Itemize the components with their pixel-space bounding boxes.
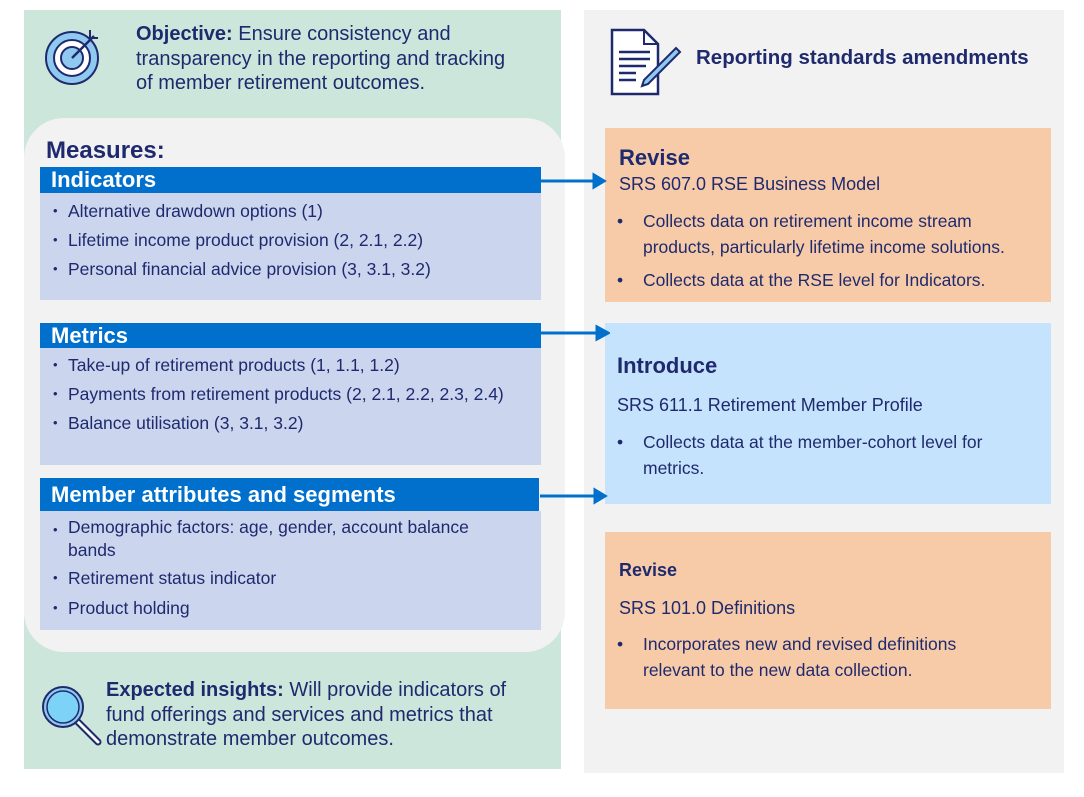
bar: member attributes: [40, 478, 539, 511]
panel: right gray: [584, 10, 1064, 773]
box: revise SRS 101.0: SRS 101.0 Definitions: [619, 598, 795, 618]
list: indicators: Alternative drawdown options (1): [68, 201, 323, 221]
text: objective: of member retirement outcomes.: [136, 72, 425, 94]
bar: metrics: Metrics: [51, 323, 128, 348]
bar: indicators: Indicators: [51, 167, 156, 192]
list: metrics: Take-up of retirement products (1, 1.1, 1.2): [68, 355, 400, 375]
panel: left green: [24, 10, 561, 769]
box: introduce SRS 611.1: Collects data at the member-cohort level for: [643, 432, 982, 452]
box: revise SRS 101.0: relevant to the new data collection.: [643, 660, 912, 680]
list: metrics: Balance utilisation (3, 3.1, 3.2): [68, 413, 303, 433]
bar: metrics: [40, 323, 541, 348]
box: revise SRS 607.0: Collects data at the RSE level for Indicators.: [643, 270, 985, 290]
section: metrics: [40, 323, 541, 465]
list: member attributes: [40, 511, 541, 630]
list: member attributes: Product holding: [68, 598, 190, 618]
box: revise SRS 607.0: [605, 128, 1051, 302]
text: expected insights: demonstrate member outcomes.: [106, 728, 394, 750]
box: revise SRS 607.0: SRS 607.0 RSE Business Model: [619, 174, 880, 194]
text: objective: [136, 23, 505, 94]
box: revise SRS 607.0: Collects data on retirement income stream: [643, 211, 972, 231]
heading: reporting standards amendments: Reporting standards amendments: [696, 46, 1029, 69]
box: introduce SRS 611.1: [605, 323, 1051, 504]
icon: magnifier: [42, 686, 102, 746]
bar: member attributes: Member attributes and segments: [51, 482, 396, 507]
box: revise SRS 101.0: [605, 532, 1051, 709]
box: introduce SRS 611.1: metrics.: [643, 458, 704, 478]
list: metrics: [40, 348, 541, 465]
text: expected insights: Expected insights: Will provide indicators of: [106, 679, 506, 701]
heading: measures: Measures:: [46, 137, 165, 164]
list: member attributes: bands: [68, 540, 116, 560]
list: metrics: Payments from retirement products (2, 2.1, 2.2, 2.3, 2.4): [68, 384, 504, 404]
list: indicators: Lifetime income product provision (2, 2.1, 2.2): [68, 230, 423, 250]
section: indicators: [40, 167, 541, 300]
text: objective: Objective: Ensure consistency and: [136, 23, 451, 45]
box: revise SRS 607.0: Revise: [619, 145, 690, 170]
icon: target: [45, 30, 99, 85]
list: indicators: [40, 193, 541, 300]
text: objective: transparency in the reporting and tracking: [136, 48, 505, 70]
box: introduce SRS 611.1: Introduce: [617, 353, 717, 378]
text: expected insights: [106, 679, 506, 750]
list: member attributes: Demographic factors: age, gender, account balance: [68, 517, 469, 537]
box: revise SRS 607.0: products, particularly lifetime income solutions.: [643, 237, 1005, 257]
text: expected insights: fund offerings and services and metrics that: [106, 704, 493, 726]
list: member attributes: Retirement status indicator: [68, 568, 276, 588]
icon: document with pen: [610, 28, 682, 96]
bar: indicators: [40, 167, 541, 193]
list: indicators: Personal financial advice provision (3, 3.1, 3.2): [68, 259, 431, 279]
panel: measures: [24, 118, 565, 652]
box: revise SRS 101.0: Revise: [619, 560, 677, 580]
section: member attributes: [40, 478, 541, 630]
box: revise SRS 101.0: Incorporates new and revised definitions: [643, 634, 956, 654]
arrows: [540, 172, 610, 505]
box: introduce SRS 611.1: SRS 611.1 Retirement Member Profile: [617, 395, 923, 415]
